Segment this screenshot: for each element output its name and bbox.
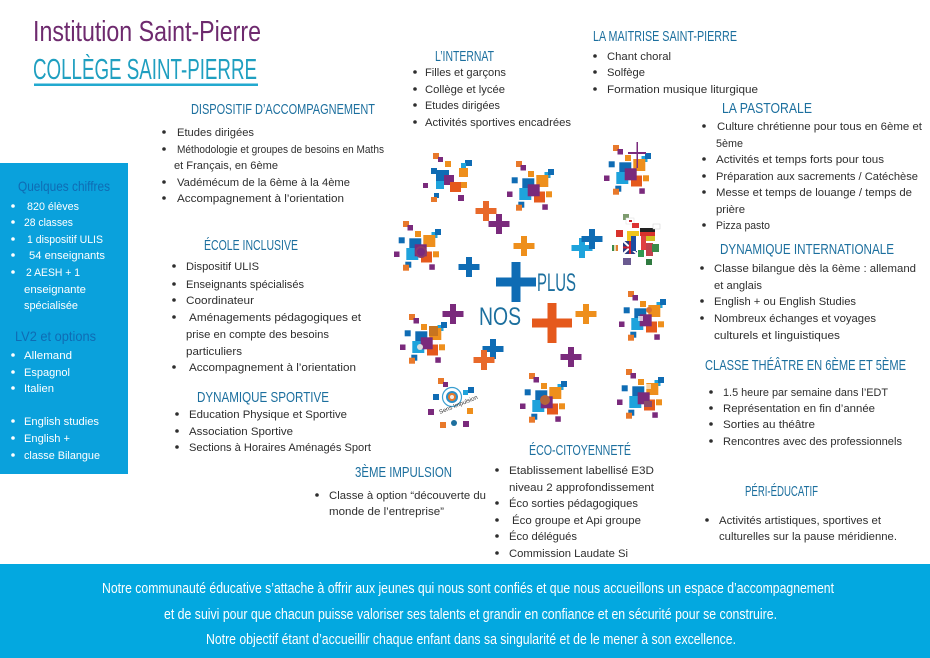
panel: classe théâtre bbox=[705, 357, 906, 448]
list: options: English studies bbox=[24, 416, 99, 428]
list: chiffres: 1 dispositif ULIS bbox=[27, 234, 103, 246]
list: chiffres: 54 enseignants bbox=[29, 250, 105, 262]
word: PLUS: PLUS bbox=[537, 269, 576, 297]
list bbox=[709, 387, 902, 448]
list: Education Physique et Sportive bbox=[189, 409, 347, 421]
heading: LA MAITRISE SAINT-PIERRE bbox=[593, 28, 737, 45]
list: Représentation en fin d’année bbox=[723, 403, 875, 415]
title: Institution Saint-Pierre: Institution Saint-Pierre bbox=[33, 16, 261, 48]
panel: école inclusive bbox=[172, 237, 361, 374]
list: particuliers bbox=[186, 346, 243, 358]
heading: DISPOSITIF D’ACCOMPAGNEMENT bbox=[191, 101, 375, 118]
list: chiffres bbox=[11, 201, 105, 312]
list: Nombreux échanges et voyages bbox=[714, 313, 877, 325]
icon: cluster with activities bbox=[617, 369, 664, 419]
footer text: Notre objectif étant d’accueillir chaque enfant dans sa singularité et de le mener à son excellence. bbox=[206, 631, 736, 648]
panel: dynamique internationale bbox=[700, 241, 916, 342]
list: Activités et temps forts pour tous bbox=[716, 154, 885, 166]
list: Messe et temps de louange / temps de bbox=[716, 187, 912, 199]
list: Sections à Horaires Aménagés Sport bbox=[189, 442, 371, 454]
list: Coordinateur bbox=[186, 295, 254, 307]
word: NOS: NOS bbox=[479, 303, 521, 331]
icon: cluster with cross bbox=[604, 142, 651, 195]
list: Pizza pasto bbox=[716, 220, 770, 232]
graphic: central plus signs and icon clusters bbox=[394, 142, 666, 428]
list: Association Sportive bbox=[189, 426, 293, 438]
list: prière bbox=[716, 204, 745, 216]
icon: cluster with bag bbox=[507, 161, 554, 211]
panel: la pastorale bbox=[702, 100, 922, 232]
icon: cluster with planet bbox=[520, 373, 567, 423]
list: Aménagements pédagogiques et bbox=[189, 312, 361, 324]
list: Collège et lycée bbox=[425, 84, 505, 96]
panel: 3ème impulsion bbox=[315, 464, 486, 518]
list: culturels et linguistiques bbox=[714, 330, 841, 342]
list: Activités artistiques, sportives et bbox=[719, 515, 881, 527]
heading: ÉCO-CITOYENNETÉ bbox=[529, 442, 631, 459]
list bbox=[315, 490, 486, 518]
list: chiffres: 28 classes bbox=[24, 217, 73, 229]
list: Culture chrétienne pour tous en 6ème et bbox=[717, 121, 922, 133]
list: Sorties au théâtre bbox=[723, 419, 815, 431]
heading: ÉCOLE INCLUSIVE bbox=[204, 237, 298, 254]
list: chiffres: 820 élèves bbox=[27, 201, 79, 213]
icon: cluster with photos bbox=[400, 314, 447, 364]
list bbox=[702, 121, 922, 232]
list: options bbox=[11, 350, 100, 462]
list: chiffres: 2 AESH + 1 bbox=[26, 267, 80, 279]
title: Collège Saint-Pierre: COLLÈGE SAINT-PIERRE bbox=[33, 53, 257, 86]
heading: L’INTERNAT bbox=[435, 48, 494, 65]
heading: quelques chiffres: Quelques chiffres bbox=[18, 178, 110, 194]
list: 5ème bbox=[716, 138, 743, 150]
list bbox=[172, 261, 361, 374]
list: niveau 2 approfondissement bbox=[509, 482, 654, 494]
list: Activités sportives encadrées bbox=[425, 117, 572, 129]
icon: flags cluster bbox=[612, 214, 660, 265]
list: Préparation aux sacrements / Catéchèse bbox=[716, 171, 918, 183]
list: Éco délégués bbox=[509, 530, 577, 543]
list: chiffres: enseignante bbox=[24, 284, 86, 296]
heading: LV2 et options: LV2 et options bbox=[15, 328, 96, 344]
list: prise en compte des besoins bbox=[186, 329, 330, 341]
list: options: English + bbox=[24, 433, 70, 445]
list: Méthodologie et groupes de besoins en Maths bbox=[177, 144, 384, 156]
icon: sens target cluster bbox=[428, 378, 479, 428]
list: 1.5 heure par semaine dans l’EDT bbox=[723, 387, 888, 399]
list: Éco sorties pédagogiques bbox=[509, 497, 639, 510]
list bbox=[700, 263, 916, 342]
list: options: classe Bilangue bbox=[24, 450, 100, 462]
list: chiffres: spécialisée bbox=[24, 300, 78, 312]
footer band bbox=[0, 564, 930, 658]
list bbox=[413, 67, 572, 129]
list bbox=[162, 127, 384, 205]
list: Commission Laudate Si bbox=[509, 548, 628, 560]
list: et anglais bbox=[714, 280, 763, 292]
plus signs bbox=[442, 201, 602, 370]
list bbox=[705, 515, 897, 543]
list: options: Italien bbox=[24, 383, 54, 395]
list: culturelles sur la pause méridienne. bbox=[719, 531, 897, 543]
list: Filles et garçons bbox=[425, 67, 507, 79]
list: Éco groupe et Api groupe bbox=[512, 514, 641, 527]
heading: LA PASTORALE bbox=[722, 100, 812, 117]
list: Vadémécum de la 6ème à la 4ème bbox=[177, 177, 350, 189]
list: Formation musique liturgique bbox=[607, 84, 758, 96]
list: Chant choral bbox=[607, 51, 671, 63]
heading: DYNAMIQUE SPORTIVE bbox=[197, 389, 329, 406]
list: options: Espagnol bbox=[24, 367, 70, 379]
panel: dispositif d'accompagnement bbox=[162, 101, 384, 205]
list: Solfège bbox=[607, 67, 645, 79]
icon: sens target cluster: Sens Impulsion bbox=[439, 395, 479, 416]
panel: éco-citoyenneté bbox=[495, 442, 654, 560]
icon: puzzle cluster bbox=[423, 153, 472, 202]
list: Accompagnement à l’orientation bbox=[177, 193, 344, 205]
heading: PÉRI-ÉDUCATIF bbox=[745, 483, 818, 500]
list: et Français, en 6ème bbox=[174, 160, 278, 172]
list: monde de l’entreprise” bbox=[329, 506, 444, 518]
heading: 3ÈME IMPULSION bbox=[355, 464, 452, 481]
footer text: et de suivi pour que chacun puisse valoriser ses talents et grandir en confiance et en sécurité pour se construire. bbox=[164, 606, 777, 623]
list: Rencontres avec des professionnels bbox=[723, 436, 902, 448]
list bbox=[593, 51, 758, 96]
list: Classe bilangue dès la 6ème : allemand bbox=[714, 263, 916, 275]
list: Dispositif ULIS bbox=[186, 261, 259, 273]
panel: l'internat bbox=[413, 48, 572, 129]
panel: quelques chiffres bbox=[0, 163, 128, 474]
list: Classe à option “découverte du bbox=[329, 490, 486, 502]
list: English + ou English Studies bbox=[714, 296, 857, 308]
list: Accompagnement à l’orientation bbox=[189, 362, 356, 374]
list bbox=[495, 465, 654, 560]
list: Etudes dirigées bbox=[177, 127, 255, 139]
list: Etablissement labellisé E3D bbox=[509, 465, 654, 477]
list bbox=[175, 409, 371, 454]
list: options: Allemand bbox=[24, 350, 72, 362]
panel: dynamique sportive bbox=[175, 389, 371, 454]
icon: cluster with figures bbox=[394, 221, 441, 271]
list: Etudes dirigées bbox=[425, 100, 500, 112]
footer text bbox=[102, 580, 835, 648]
icon: cluster with students bbox=[619, 291, 666, 341]
panel: la maîtrise saint-pierre bbox=[593, 28, 758, 96]
panel: péri-éducatif bbox=[705, 483, 897, 543]
list: Enseignants spécialisés bbox=[186, 279, 304, 291]
